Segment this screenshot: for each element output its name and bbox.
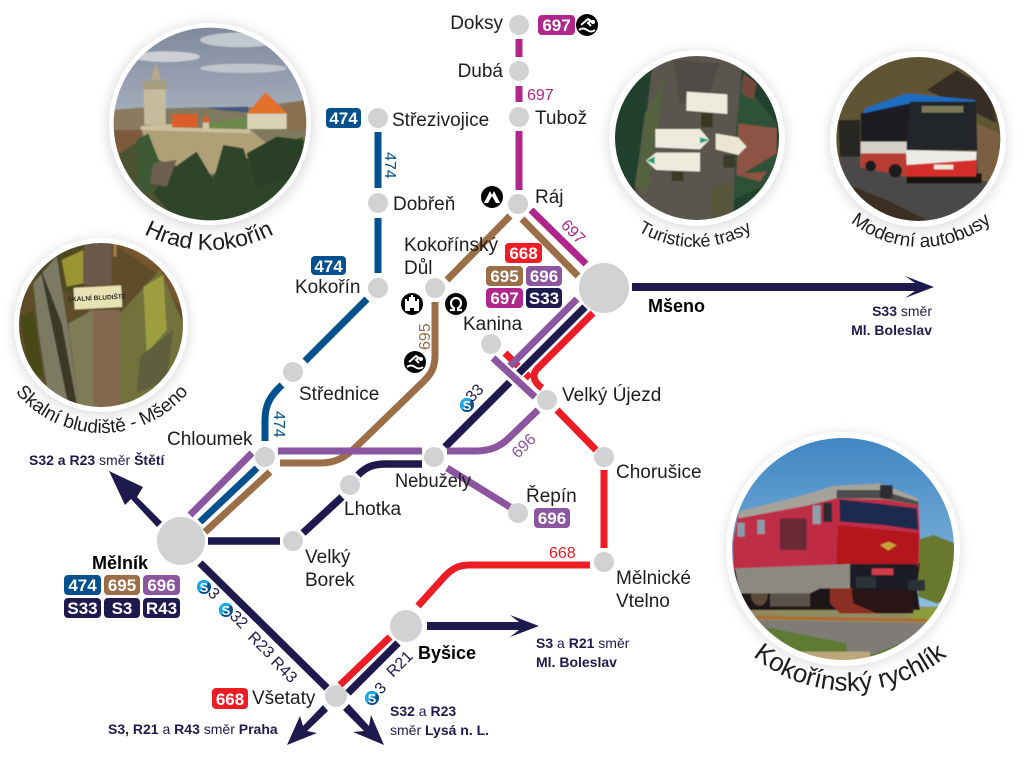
station: Mělnické Vtelno: Mělnické	[616, 568, 691, 589]
rotated line labels	[197, 87, 588, 706]
badge 474 Mělník: 474	[68, 576, 97, 595]
station: Lhotka: Lhotka	[344, 499, 401, 520]
icon: swimmer Kokořínský Důl	[404, 351, 426, 373]
note: S32 a R23 směr Lysá: směr Lysá n. L.	[390, 722, 489, 738]
badge 474 Kokořín: 474	[314, 257, 343, 276]
station: Mělník	[92, 517, 205, 573]
station: Byšice: Byšice	[418, 643, 476, 663]
badge S33 Mělník: S33	[67, 599, 98, 618]
icon: swimmer Doksy	[576, 14, 598, 36]
caption: Kokořínský rychlík: Kokořínský rychlík	[754, 643, 948, 696]
station: Střezivojice: Střezivojice	[392, 110, 489, 131]
badge 696 Mšeno: 696	[530, 267, 558, 286]
arrow: to Ml. Boleslav from Mšeno	[632, 276, 934, 298]
note: S33 směr Ml. Boleslav: Ml. Boleslav	[851, 322, 932, 338]
line 668 red	[340, 313, 604, 685]
photo: Kokořínský rychlík	[726, 432, 960, 667]
station: Kokořínský Důl: Kokořínský	[404, 235, 498, 256]
transit lines	[109, 39, 934, 745]
station: Všetaty	[252, 685, 347, 709]
station: Dobřeň: Dobřeň	[393, 194, 455, 215]
line 474	[200, 132, 378, 522]
icon: omega arch	[445, 293, 467, 315]
direction notes	[29, 303, 932, 738]
station: Lhotka	[340, 475, 401, 520]
label S3 R21: R21	[384, 648, 417, 681]
label 695: 695	[417, 323, 434, 350]
station: Mělník: Mělník	[92, 553, 149, 573]
station: Mšeno	[579, 263, 705, 316]
note: S32 a R23 směr Štětí: S32 a R23 směr Štětí	[29, 451, 166, 468]
label R23: R23	[244, 629, 277, 662]
arrow: to Praha	[287, 705, 328, 745]
label S3 Mělník: S	[200, 580, 209, 595]
badge 695 Mělník: 695	[108, 576, 136, 595]
icons	[401, 14, 598, 373]
line S33 and S lines navy	[200, 307, 585, 693]
badge 695 Mšeno: 695	[490, 267, 519, 286]
station: Všetaty: Všetaty	[252, 688, 316, 709]
station: Dobřeň	[368, 193, 455, 215]
label S3 Mělník	[197, 580, 223, 603]
badge 697 Mšeno: 697	[490, 289, 519, 308]
station: Mělnické Vtelno	[594, 552, 691, 612]
captions	[18, 212, 989, 696]
line 695	[205, 216, 578, 532]
station: Doksy	[450, 13, 529, 35]
station: Dubá: Dubá	[458, 61, 503, 82]
badge 696 Mělník: 696	[147, 576, 176, 595]
photo: Moderní autobusy	[830, 51, 1006, 229]
station: Chloumek: Chloumek	[167, 429, 253, 450]
note: S3 a R21 směr Ml. Boleslav: S3 a R21 směr	[536, 635, 629, 651]
arrow: to Lysá n. L.	[343, 704, 384, 745]
station: Kanina	[463, 314, 523, 354]
station: Velký Újezd: Velký Újezd	[562, 384, 661, 406]
station: Doksy: Doksy	[450, 13, 503, 34]
badge S3 Mělník: S3	[112, 599, 132, 618]
station: Střednice	[283, 362, 379, 405]
label S32: 32	[226, 608, 251, 632]
label S3 Mělník: 3	[204, 585, 223, 603]
note: S3 a R21 směr Ml. Boleslav: Ml. Boleslav	[536, 654, 617, 670]
note: S3, R21 a R43 směr Praha: S3, R21 a R43 směr Praha	[108, 721, 278, 737]
line 696	[190, 299, 577, 515]
label S33: 33	[463, 381, 487, 406]
station: Velký Újezd	[537, 384, 661, 410]
arrow: to Ml. Boleslav from Byšice	[427, 615, 539, 637]
label S3 R21	[365, 648, 417, 706]
station: Chorušice: Chorušice	[616, 462, 702, 483]
line 697	[519, 39, 586, 264]
station: Velký Borek: Velký	[305, 547, 351, 568]
stations	[92, 13, 705, 709]
label S33	[460, 381, 487, 413]
label 668: 668	[549, 545, 576, 562]
station: Chorušice	[594, 447, 702, 483]
badge 474 Střezivojice: 474	[329, 109, 358, 128]
label 697 diagonal: 697	[557, 217, 588, 248]
arrow: to Štětí	[109, 471, 162, 527]
icon: castle	[401, 293, 423, 315]
station: Kokořín: Kokořín	[295, 277, 360, 298]
line badges	[64, 15, 575, 709]
station: Tubož	[509, 107, 587, 129]
label 696: 696	[509, 431, 540, 462]
station: Střednice: Střednice	[299, 384, 379, 405]
label S32: S	[222, 603, 231, 618]
station: Mělnické Vtelno: Vtelno	[616, 591, 670, 612]
badge 668 Všetaty: 668	[216, 690, 244, 709]
badge 668 Mšeno: 668	[509, 244, 538, 263]
label R43: R43	[267, 654, 300, 687]
station: Velký Borek: Borek	[305, 570, 355, 591]
sign text: Skalní bludiště: SKALNÍ BLUDIŠTĚ	[67, 291, 127, 304]
caption: Turistické trasy: Turistické trasy	[642, 220, 750, 247]
station: Nebužely	[395, 447, 471, 492]
station: Velký Borek	[283, 531, 355, 591]
station: Tubož: Tubož	[535, 108, 587, 129]
badge S3 Mělník	[104, 598, 140, 618]
label 474 lower: 474	[270, 411, 287, 438]
badge 697 Doksy: 697	[542, 16, 571, 35]
station: Byšice	[390, 610, 476, 663]
station: Ráj	[508, 187, 564, 214]
station: Chloumek	[167, 429, 275, 467]
caption: Hrad Kokořín: Hrad Kokořín	[146, 220, 273, 250]
label 474 upper: 474	[381, 152, 398, 179]
caption: Skalní bludiště - Mšeno: Skalní bludiště - Mšeno	[18, 386, 186, 434]
photo: Hrad Kokořín	[108, 23, 312, 228]
station: Nebužely: Nebužely	[395, 471, 471, 492]
caption: Moderní autobusy: Moderní autobusy	[852, 212, 989, 248]
badge S33 Mšeno: S33	[529, 289, 559, 308]
station: Řepín	[508, 485, 577, 523]
label S33: S	[463, 398, 472, 413]
label S3 R21: 3	[372, 679, 390, 698]
station: Kanina: Kanina	[463, 314, 523, 335]
photo: Turistické trasy	[609, 50, 785, 228]
station: Mšeno: Mšeno	[648, 296, 705, 316]
station: Dubá	[458, 61, 529, 82]
note: S33 směr Ml. Boleslav: S33 směr	[872, 303, 932, 319]
station: Ráj: Ráj	[535, 187, 564, 208]
label 697 vertical: 697	[527, 87, 554, 104]
station: Řepín: Řepín	[526, 485, 577, 507]
badge R43 Mělník: R43	[146, 599, 177, 618]
label S3 R21: S	[368, 691, 377, 706]
icon: mountains Ráj	[481, 186, 503, 208]
photo: Skalní bludiště	[14, 238, 188, 414]
badge 696 Řepín: 696	[538, 509, 566, 528]
station: Kokořínský Důl: Důl	[404, 258, 433, 279]
station: Kokořínský Důl	[404, 235, 498, 298]
label S32	[219, 603, 251, 632]
note: S32 a R23 směr Lysá: S32 a R23	[390, 703, 456, 719]
